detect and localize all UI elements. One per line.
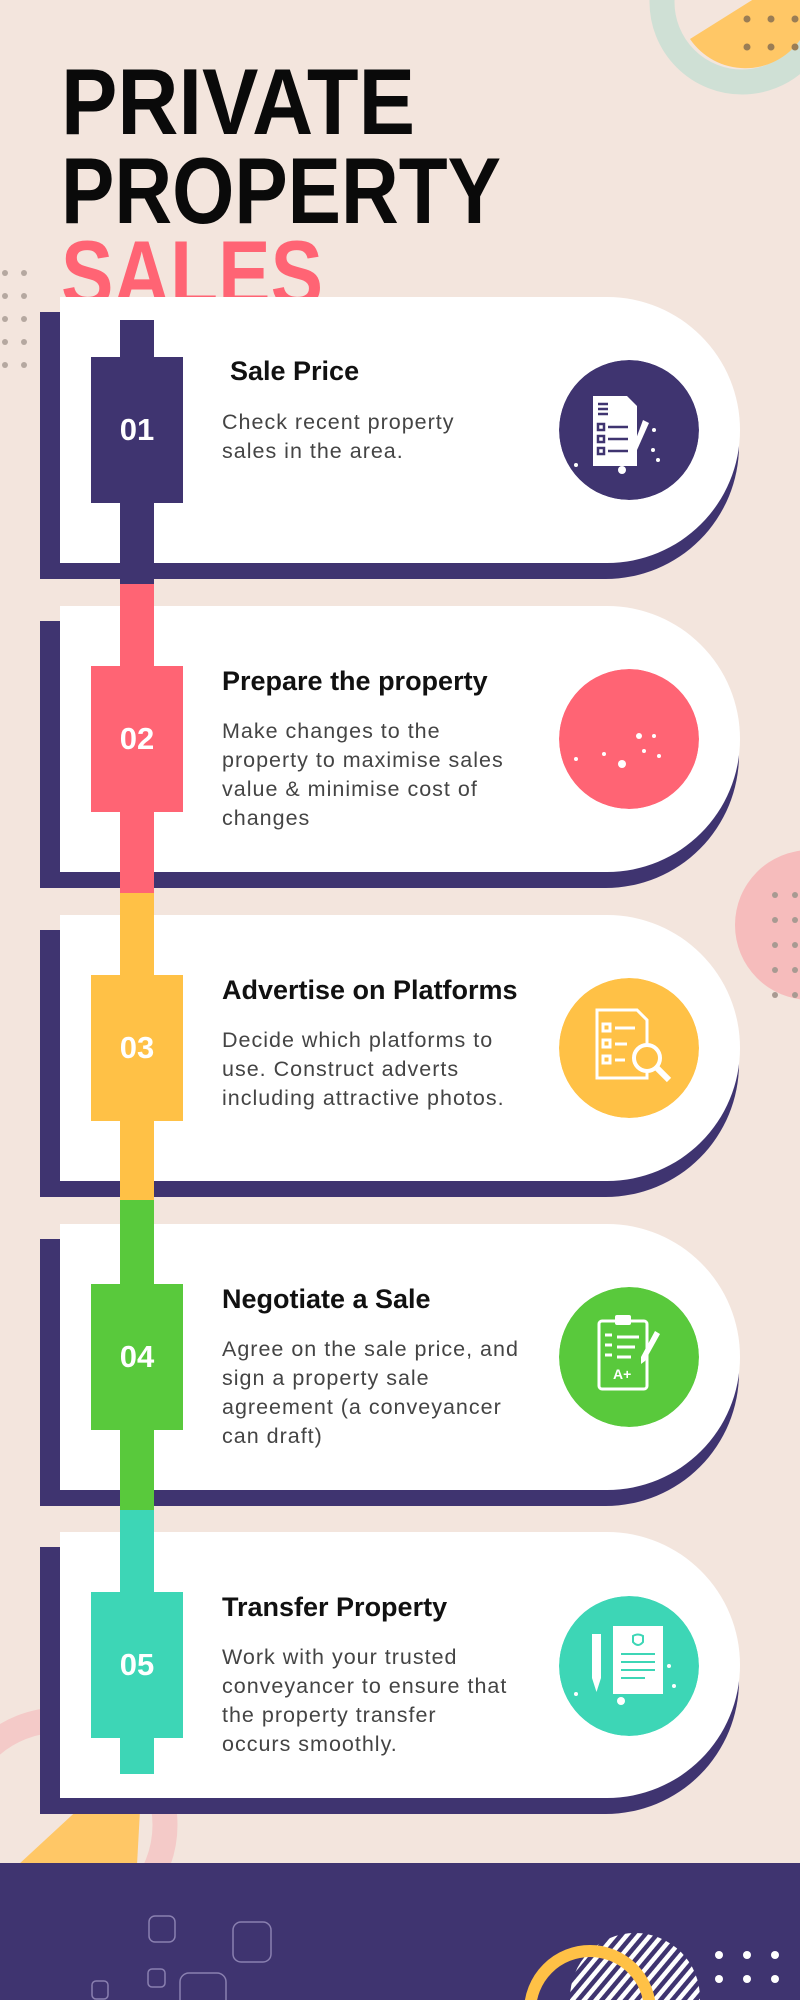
icon: pen and contract (559, 1596, 699, 1736)
number 05 (91, 1592, 183, 1738)
heading 2: Prepare the property (222, 666, 488, 696)
footer (0, 1863, 800, 2000)
title (61, 49, 501, 320)
icon: pink circle (559, 669, 699, 809)
text 3: including attractive photos. (222, 1086, 505, 1110)
number 04: 04 (120, 1339, 154, 1374)
number 03 (91, 975, 183, 1121)
decoration: outlined squares (91, 1915, 272, 2000)
text 4 (222, 1337, 519, 1448)
number 02: 02 (120, 721, 154, 756)
number 02 (91, 666, 183, 812)
text 4: Agree on the sale price, and (222, 1337, 519, 1361)
title: PRIVATE (61, 49, 415, 154)
text 5: occurs smoothly. (222, 1732, 398, 1756)
number 04 (91, 1284, 183, 1430)
card 2 (60, 606, 740, 872)
decoration: left dots (2, 270, 27, 368)
icon: magnifier on list (559, 978, 699, 1118)
icon: checklist document (559, 360, 699, 500)
decoration: striped circle and ring (524, 1933, 779, 2000)
card 1 (60, 297, 740, 563)
text 1: sales in the area. (222, 439, 404, 463)
heading 3: Advertise on Platforms (222, 975, 518, 1005)
number 05: 05 (120, 1647, 154, 1682)
text 4: sign a property sale (222, 1366, 430, 1390)
text 2: property to maximise sales (222, 748, 504, 772)
text 2 (222, 719, 504, 830)
decoration: right pink half circle (735, 850, 800, 1000)
text 4: agreement (a conveyancer (222, 1395, 502, 1419)
card 3 (60, 915, 740, 1181)
text 3: use. Construct adverts (222, 1057, 459, 1081)
icon: clipboard A+: A+ (613, 1366, 631, 1382)
text 2: changes (222, 806, 310, 830)
card 4 (60, 1224, 740, 1490)
text 2: value & minimise cost of (222, 777, 478, 801)
decoration: bottom-left shapes (0, 1709, 178, 1863)
icon: clipboard A+ (559, 1287, 699, 1427)
number 03: 03 (120, 1030, 154, 1065)
text 5: Work with your trusted (222, 1645, 457, 1669)
heading 4: Negotiate a Sale (222, 1284, 431, 1314)
text 1: Check recent property (222, 410, 455, 434)
text 5: the property transfer (222, 1703, 437, 1727)
heading 5: Transfer Property (222, 1592, 447, 1622)
text 5 (222, 1645, 507, 1756)
text 2: Make changes to the (222, 719, 441, 743)
text 4: can draft) (222, 1424, 323, 1448)
timeline strip (120, 320, 154, 1774)
text 3: Decide which platforms to (222, 1028, 493, 1052)
card 5 (60, 1532, 740, 1798)
text 1 (222, 410, 455, 463)
text 3 (222, 1028, 505, 1110)
card shadows (40, 312, 739, 1814)
text 5: conveyancer to ensure that (222, 1674, 507, 1698)
heading 1: Sale Price (230, 356, 359, 386)
number 01 (91, 357, 183, 503)
decoration: top-right ring (650, 0, 800, 94)
number 01: 01 (120, 412, 154, 447)
